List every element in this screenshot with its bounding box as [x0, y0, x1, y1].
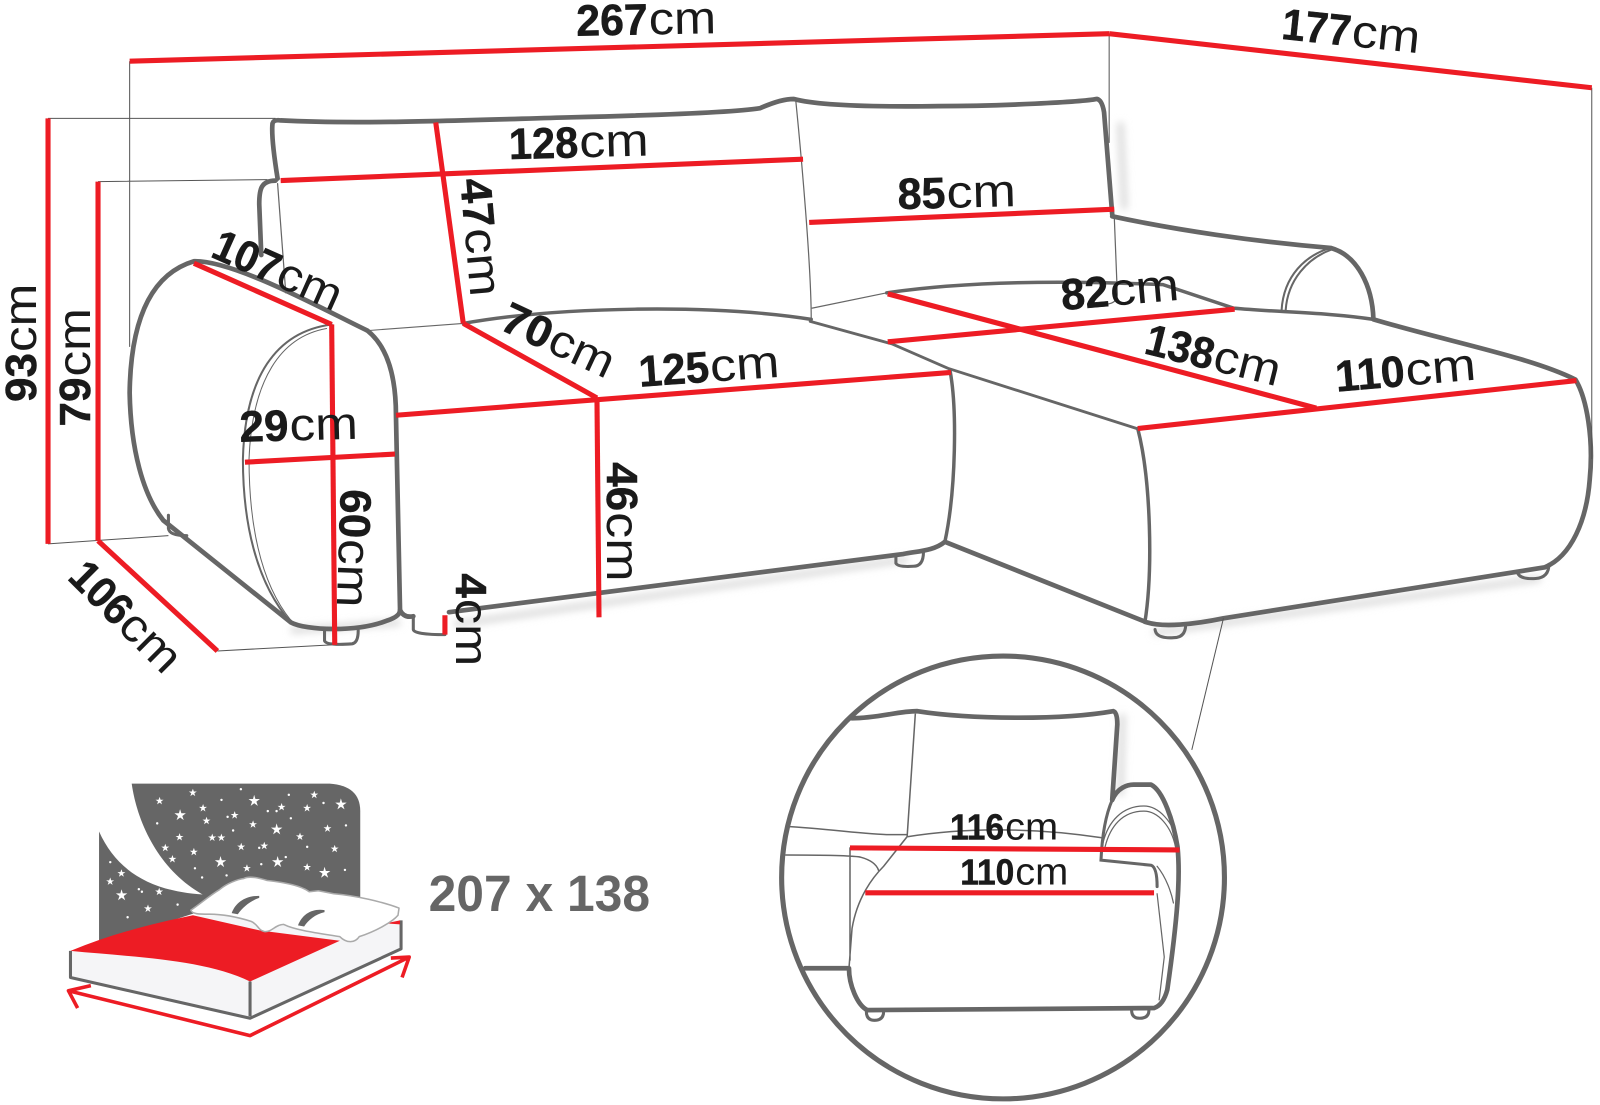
sofa back cushions [272, 99, 1112, 214]
label 110cm: 110cm [1333, 338, 1478, 402]
label 47cm: 47cm [450, 176, 512, 298]
138 line [888, 294, 1316, 408]
night sky lower [99, 832, 209, 944]
bed dimension arrows [68, 957, 409, 1036]
left armrest [130, 261, 400, 629]
left seat lines [786, 714, 915, 968]
46 line [597, 398, 599, 617]
cushion and chaise outline [805, 711, 1179, 1010]
label 116cm: 116cm [950, 806, 1058, 848]
armrest inner panel [243, 324, 332, 622]
47 line [436, 122, 463, 323]
29 line [245, 454, 395, 462]
label 60cm: 60 cm [327, 488, 383, 608]
label 85cm: 85cm [897, 164, 1017, 219]
circle feet [866, 1010, 1149, 1020]
extension guide lines [48, 34, 1592, 651]
mattress [70, 915, 401, 1018]
pillow creases [232, 896, 325, 926]
93 line [46, 118, 51, 544]
label 128cm: 128cm [508, 114, 649, 169]
back left edge [259, 181, 276, 255]
chaise roll end [1282, 248, 1331, 310]
107 line [194, 263, 332, 324]
chaise corner [945, 370, 1150, 622]
267 line [130, 34, 1109, 61]
label 29cm: 29cm [239, 397, 358, 452]
night sky upper [132, 784, 360, 898]
pillows [191, 877, 399, 942]
4 line [442, 615, 447, 635]
main seat cushion top [463, 309, 811, 323]
feet [168, 515, 1549, 644]
label 82cm: 82cm [1059, 258, 1181, 320]
79 line [96, 182, 101, 541]
125 line [396, 372, 951, 415]
116 line [850, 848, 1180, 850]
106 line [98, 541, 217, 651]
seat back line [908, 830, 1101, 838]
stars [106, 789, 347, 912]
85 line [809, 209, 1114, 222]
front seat edge [810, 321, 1137, 429]
60 line [332, 324, 335, 645]
bed size label: 207 x 138 [429, 865, 650, 922]
177 line [1109, 34, 1592, 88]
label 79cm: 79cm [48, 308, 100, 426]
small red sheet corner [386, 920, 400, 924]
chaise seat top edge [887, 282, 1373, 319]
leader line to detail circle [1192, 618, 1223, 750]
dimension labels [0, 0, 1478, 683]
back cushion seams [278, 102, 1117, 319]
label 46cm: 46 cm [597, 462, 649, 582]
label 110cm: 110cm [960, 851, 1068, 893]
arm detail [1101, 800, 1157, 887]
main seat bottom [400, 542, 945, 617]
label 177cm: 177cm [1280, 0, 1423, 63]
70 line [463, 323, 597, 398]
128 line [281, 159, 803, 181]
detail circle: chaise end view [782, 656, 1224, 1099]
small star dots [110, 789, 346, 917]
red bedsheet [70, 915, 340, 982]
label 138cm: 138cm [1140, 312, 1287, 396]
label 70cm: 70cm [494, 290, 624, 388]
label 106cm: 106cm [59, 549, 193, 683]
sofa drawing [130, 99, 1591, 796]
mattress edges [70, 920, 401, 1018]
dimension lines [48, 34, 1592, 651]
bed icon [68, 784, 409, 1036]
chaise backrest [945, 216, 1591, 625]
110 line [865, 890, 1154, 895]
82 line [888, 309, 1235, 342]
label 4cm: 4 cm [446, 573, 498, 666]
label 125cm: 125cm [637, 335, 781, 397]
110 line [1138, 381, 1576, 429]
label 107cm: 107cm [205, 218, 351, 321]
